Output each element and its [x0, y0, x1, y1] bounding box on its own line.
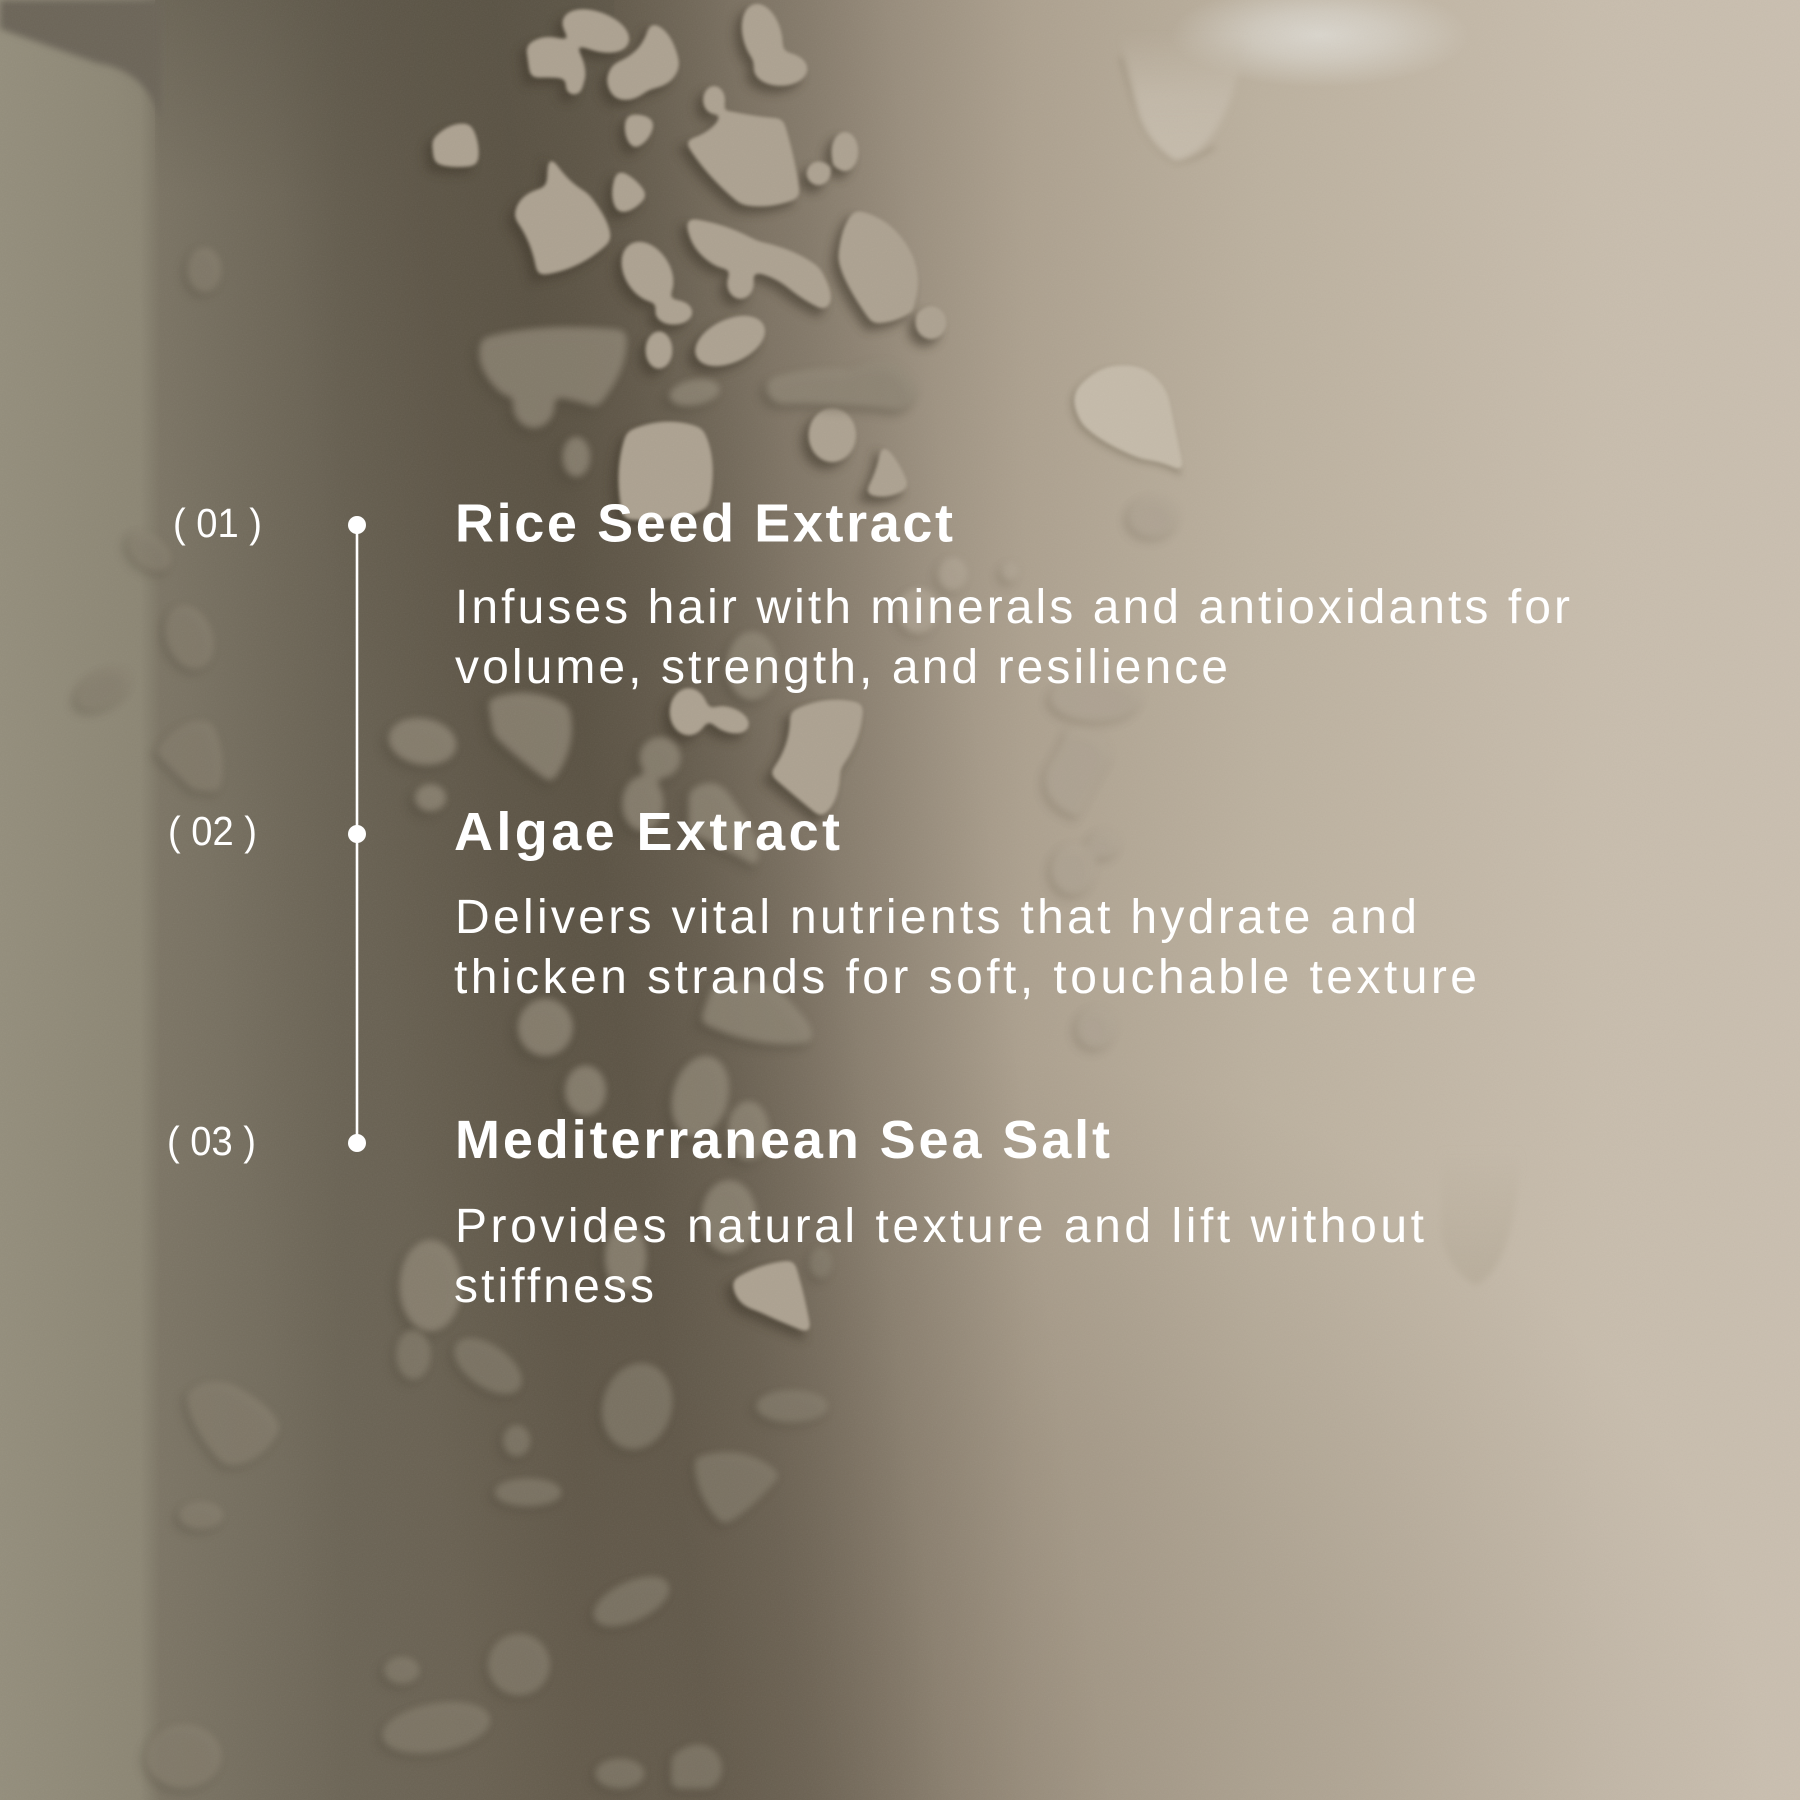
heading: Rice Seed Extract: Rice Seed Extract — [455, 494, 953, 554]
item 02 — [168, 802, 1477, 1004]
droplet cluster: mid — [379, 327, 918, 1337]
top left dark corner — [0, 0, 161, 121]
description 01: volume, strength, and resilience — [455, 641, 1228, 694]
item 03 — [167, 1110, 1424, 1313]
droplet cluster: bright — [425, 0, 947, 1341]
number 01: ( 01 ) — [173, 500, 262, 546]
number 03: ( 03 ) — [167, 1118, 256, 1164]
droplet: pale trail lower right — [1441, 1148, 1521, 1286]
description 03: stiffness — [454, 1260, 654, 1313]
description 01 — [455, 581, 1570, 694]
description 03: Provides natural texture and lift without — [455, 1200, 1424, 1253]
top right glare — [1148, 0, 1515, 103]
description 01: Infuses hair with minerals and antioxidants for — [455, 581, 1570, 634]
heading: Mediterranean Sea Salt: Mediterranean Sea Salt — [455, 1110, 1110, 1170]
description 02: thicken strands for soft, touchable texture — [454, 951, 1477, 1004]
description 02 — [454, 891, 1477, 1004]
heading: Algae Extract: Algae Extract — [454, 802, 840, 862]
item 01 — [173, 494, 1570, 694]
number 02: ( 02 ) — [168, 808, 257, 854]
description 03 — [454, 1200, 1424, 1313]
description 02: Delivers vital nutrients that hydrate and — [455, 891, 1417, 944]
droplet cluster: faded — [64, 247, 832, 1793]
droplet cluster: faded right side — [893, 496, 1179, 1053]
timeline line and dots — [348, 516, 366, 1152]
top dark shade — [155, 0, 614, 195]
droplet: large right — [1070, 365, 1185, 476]
droplet: pale trail top right — [1120, 34, 1246, 162]
